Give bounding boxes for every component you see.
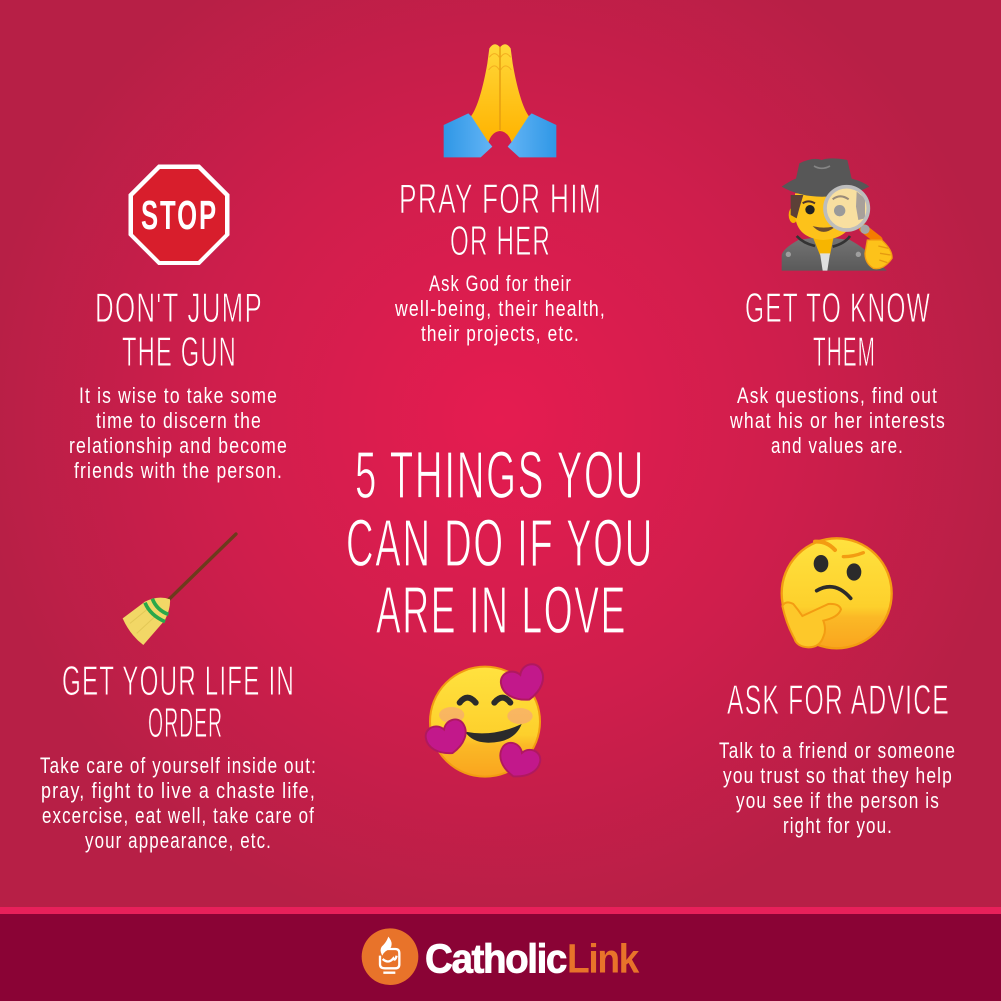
heading: get your life in order: [62, 657, 295, 746]
text: ask for advice description: right for you.: [783, 813, 893, 838]
heading: get to know them: [745, 284, 931, 375]
heading: get your life in order: ORDER: [148, 699, 223, 746]
title: 5 THINGS YOU: [355, 438, 645, 513]
wordmark: Link: [567, 936, 640, 982]
text: don't jump description: time to discern the: [96, 408, 262, 433]
text: don't jump description: friends with the person.: [74, 458, 283, 483]
logo: Catholic Link: [362, 928, 640, 985]
title: ARE IN LOVE: [376, 573, 627, 648]
icon: thinking face: [782, 538, 892, 648]
text: life in order description: excercise, eat well, take care of: [42, 803, 315, 828]
text: get to know description: [729, 383, 946, 458]
text: pray description: their projects, etc.: [421, 321, 580, 346]
text: don't jump description: [69, 383, 288, 483]
panel: get to know them: [729, 158, 946, 458]
text: life in order description: Take care of yourself inside out:: [40, 753, 317, 778]
heading: pray for him or her: PRAY FOR HIM: [399, 175, 602, 222]
text: life in order description: pray, fight to live a chaste life,: [41, 778, 316, 803]
title: [346, 438, 654, 648]
icon: detective: [782, 158, 892, 271]
text: ask for advice description: you see if the person is: [736, 788, 940, 813]
heading: don't jump the gun: THE GUN: [122, 328, 237, 375]
panel: don't jump the gun: [69, 165, 288, 483]
footer band: [0, 907, 1001, 1001]
heading: get your life in order: GET YOUR LIFE IN: [62, 657, 295, 704]
icon: broom: [123, 534, 236, 645]
text: pray description: [394, 271, 606, 346]
icon: smiling face with hearts: [423, 661, 549, 783]
text: get to know description: Ask questions, find out: [737, 383, 938, 408]
text: get to know description: what his or her interests: [729, 408, 946, 433]
panel: get your life in order: [40, 534, 317, 853]
text: don't jump description: It is wise to take some: [79, 383, 278, 408]
heading: get to know them: THEM: [813, 328, 876, 375]
text: don't jump description: relationship and become: [69, 433, 288, 458]
panel: pray for him or her: [394, 44, 606, 346]
icon: flame cup: [362, 928, 418, 985]
icon: stop sign: [129, 165, 229, 264]
panel: ask for advice: [719, 538, 956, 838]
icon: stop sign: STOP: [141, 192, 218, 238]
text: pray description: Ask God for their: [429, 271, 572, 296]
heading: don't jump the gun: [95, 284, 263, 375]
text: ask for advice description: [719, 738, 956, 838]
heading: pray for him or her: [399, 175, 602, 264]
icon: praying hands: [444, 44, 556, 157]
text: pray description: well-being, their health,: [394, 296, 606, 321]
heading: pray for him or her: OR HER: [450, 217, 551, 264]
title: CAN DO IF YOU: [346, 506, 654, 581]
wordmark: [425, 936, 640, 982]
text: life in order description: your appearance, etc.: [85, 828, 272, 853]
text: life in order description: [40, 753, 317, 853]
wordmark: Catholic: [425, 936, 567, 982]
text: get to know description: and values are.: [771, 433, 904, 458]
heading: don't jump the gun: DON'T JUMP: [95, 284, 263, 331]
